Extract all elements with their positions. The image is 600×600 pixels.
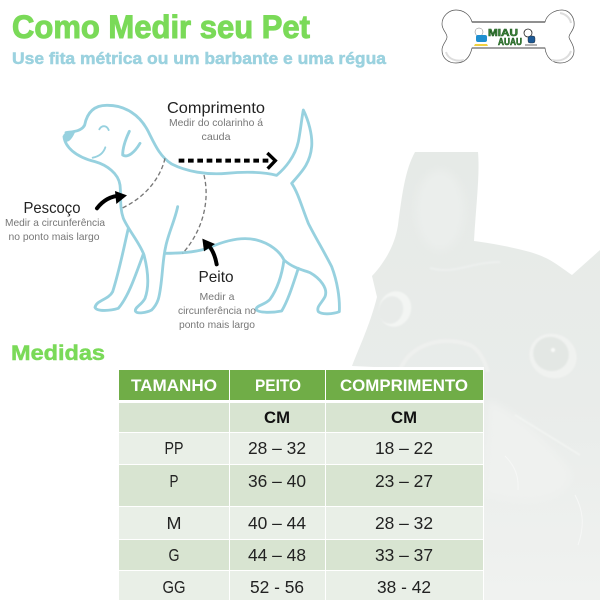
label: pescoço: Pescoço [24, 200, 81, 217]
table header: PEITO [255, 376, 301, 395]
label: peito: ponto mais largo [179, 319, 255, 331]
logo wordmark: MIAU [488, 28, 518, 39]
subtitle: Use fita métrica ou um barbante e uma régua [12, 49, 387, 68]
label: pescoço [5, 200, 105, 243]
row: M: M [166, 513, 182, 533]
row: GG [119, 571, 483, 600]
logo mascot: dog [524, 29, 537, 45]
muzzle [400, 341, 488, 372]
dog diagram [63, 105, 339, 314]
table header: TAMANHO [131, 376, 217, 395]
arrow: pescoço [97, 191, 127, 208]
row: PP: 28 – 32 [248, 438, 306, 458]
logo wordmark: AUAU [498, 37, 522, 48]
label: pescoço: Medir a circunferência [5, 217, 105, 229]
row: GG: 52 - 56 [250, 577, 304, 597]
row: M: 28 – 32 [375, 513, 433, 533]
label: peito: Medir a [200, 291, 235, 303]
label: pescoço: no ponto mais largo [8, 231, 100, 243]
row: M: 40 – 44 [248, 513, 306, 533]
dog nose [63, 131, 75, 142]
arrow: comprimento [179, 153, 275, 169]
background photo: french bulldog [352, 152, 600, 600]
logo wordmark [488, 28, 522, 48]
left eye [374, 287, 416, 331]
row: M [119, 507, 483, 539]
row: P: 36 – 40 [248, 471, 306, 491]
row: units [119, 403, 483, 432]
row: units: CM [391, 408, 417, 427]
label: peito [178, 269, 256, 331]
row: PP: PP [164, 438, 184, 458]
row: P: 23 – 27 [375, 471, 433, 491]
row: PP: 18 – 22 [375, 438, 433, 458]
label: comprimento: Medir do colarinho á [169, 117, 263, 129]
row: G: 33 – 37 [375, 545, 433, 565]
row: GG: GG [162, 577, 186, 597]
neck dashed line [122, 158, 165, 208]
row: G: G [168, 545, 180, 565]
row: G: 44 – 48 [248, 545, 306, 565]
label: peito: Peito [198, 269, 234, 286]
row: PP [119, 433, 483, 464]
row: P [119, 465, 483, 506]
logo: bone badge [442, 10, 574, 63]
ear highlight [416, 170, 464, 250]
title: Como Medir seu Pet [12, 9, 310, 45]
right eye [522, 326, 584, 386]
label: peito: circunferência no [178, 305, 256, 317]
row: G [119, 540, 483, 570]
dog outline [64, 105, 339, 314]
arrow: peito [202, 239, 217, 264]
size table [117, 367, 484, 600]
label: comprimento [167, 100, 265, 143]
label: comprimento: cauda [202, 131, 231, 143]
row: P: P [170, 471, 178, 491]
table header: COMPRIMENTO [340, 376, 468, 395]
label: comprimento: Comprimento [167, 100, 265, 117]
chest dashed line [183, 175, 206, 253]
heading: medidas: Medidas [11, 342, 105, 365]
logo mascot: duck [474, 28, 488, 46]
row: GG: 38 - 42 [377, 577, 431, 597]
table header [119, 370, 483, 400]
row: units: CM [264, 408, 290, 427]
